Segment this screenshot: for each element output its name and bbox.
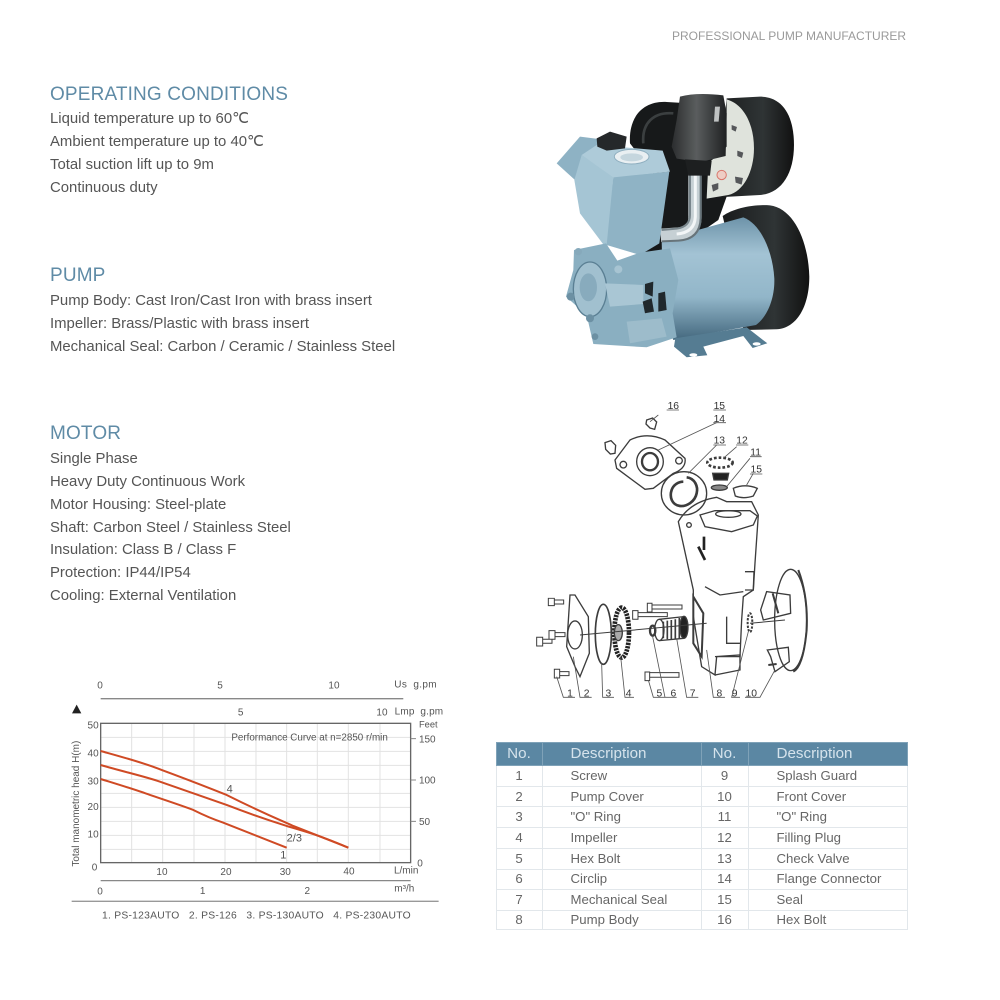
right axis labels: 150 (419, 734, 436, 745)
text: motor: Protection: IP44/IP54 (50, 565, 191, 581)
parts table: Check Valve (776, 851, 850, 866)
y axis labels: 30 (88, 776, 99, 787)
parts table: 15 (717, 892, 732, 907)
top axes: Lmp g.pm (395, 707, 443, 718)
parts table: Screw (570, 768, 607, 783)
y axis labels: 40 (88, 748, 99, 759)
flange connector (605, 418, 685, 489)
knob (672, 94, 727, 162)
pump cover (567, 595, 707, 677)
parts table: 2 (515, 789, 523, 804)
parts table: No. (713, 745, 736, 762)
bottom axes: m³/h (394, 884, 414, 895)
parts table: Filling Plug (776, 830, 841, 845)
parts table: 11 (718, 809, 731, 824)
chrome pipe (661, 173, 695, 235)
upper motor (717, 97, 794, 197)
parts table: "O" Ring (776, 809, 827, 824)
right axis labels: Feet (419, 719, 438, 729)
text: operating conditions: Ambient temperature up to 40℃ (50, 134, 264, 150)
curve labels (227, 783, 302, 862)
y axis labels: 20 (88, 802, 99, 813)
leader lines (557, 410, 775, 697)
y axis labels: 50 (88, 721, 99, 732)
heading: pump: PUMP (50, 265, 106, 286)
parts table: "O" Ring (570, 809, 621, 824)
parts table: 1 (515, 768, 523, 783)
part numbers: 7 (690, 688, 696, 699)
filling plug (597, 132, 627, 151)
pressure switch cover (707, 99, 754, 199)
text: operating conditions: Liquid temperature up to 60℃ (50, 111, 249, 127)
parts table: 4 (515, 830, 523, 845)
curve labels: 4 (227, 783, 233, 795)
part numbers: 13 (714, 436, 725, 447)
bottom axes: 0 (97, 887, 103, 898)
parts table: 9 (721, 768, 728, 783)
parts table: Impeller (570, 830, 617, 845)
mounting foot (674, 327, 767, 357)
part numbers: 14 (714, 414, 725, 425)
heading: motor: MOTOR (50, 423, 121, 444)
part numbers: 16 (668, 401, 679, 412)
part numbers: 2 (584, 688, 590, 699)
bottom axes: 20 (220, 867, 232, 878)
text: motor: Heavy Duty Continuous Work (50, 474, 245, 490)
knob nut (685, 159, 712, 176)
y axis labels: Total manometric head H(m) (71, 741, 82, 867)
parts table: 5 (515, 851, 523, 866)
part numbers: 5 (656, 688, 662, 699)
o ring (595, 604, 611, 664)
bottom axes: 2 (305, 886, 311, 897)
bottom axes (97, 866, 418, 898)
text: pump: Pump Body: Cast Iron/Cast Iron with brass insert (50, 293, 372, 309)
chart title: Performance Curve at n=2850 r/min (231, 733, 388, 744)
part numbers: 9 (732, 688, 738, 699)
part numbers: 15 (714, 401, 725, 412)
text: motor: Single Phase (50, 451, 138, 467)
bottom axes: 30 (280, 867, 291, 878)
text: pump (50, 293, 395, 355)
parts table: Circlip (570, 871, 607, 886)
splash guard (748, 613, 752, 632)
parts table: Description (570, 745, 646, 762)
bottom axes: 40 (343, 866, 355, 877)
text: pump: Mechanical Seal: Carbon / Ceramic / Stainless Steel (50, 339, 395, 355)
part numbers: 15 (751, 465, 762, 476)
front cover (750, 569, 807, 672)
parts table: Splash Guard (776, 768, 857, 783)
lower motor body (662, 217, 774, 340)
part numbers: 4 (626, 688, 632, 699)
parts table: 14 (717, 871, 732, 886)
parts table: 3 (515, 809, 523, 824)
top axes: 5 (217, 681, 223, 692)
curve 2/3 (101, 765, 348, 848)
right axis labels: 50 (419, 817, 431, 828)
curve 1 (101, 779, 287, 848)
part numbers: 6 (670, 688, 676, 699)
bottom axes: L/min (394, 866, 418, 877)
parts table: Pump Body (570, 912, 639, 927)
part numbers: 11 (750, 447, 761, 458)
parts table: No. (507, 745, 531, 762)
bottom axes: 10 (156, 867, 168, 878)
part numbers: 12 (736, 436, 748, 447)
pump volute (566, 243, 678, 347)
parts table: 7 (515, 892, 523, 907)
top axes: 5 (238, 708, 244, 719)
part numbers: 3 (605, 688, 611, 699)
parts table (496, 742, 908, 930)
parts table: Flange Connector (776, 871, 881, 886)
text: motor: Insulation: Class B / Class F (50, 542, 236, 558)
top axes (97, 679, 443, 719)
curve labels: 2/3 (287, 832, 302, 844)
top axes: 10 (328, 681, 340, 692)
screws (537, 598, 682, 681)
parts table: 13 (717, 851, 732, 866)
y axis labels: 0 (92, 862, 98, 873)
mechanical seal (655, 616, 688, 641)
lower motor end cap (723, 205, 809, 330)
right axis labels: 100 (419, 776, 436, 787)
impeller (614, 608, 629, 658)
top axes: 10 (376, 707, 388, 718)
parts table: Hex Bolt (776, 912, 826, 927)
parts table: 8 (515, 912, 523, 927)
text: motor (50, 451, 291, 604)
parts table: 10 (717, 789, 732, 804)
dark backing and hose loop (630, 102, 727, 255)
right axis labels (411, 719, 438, 869)
text: motor: Motor Housing: Steel-plate (50, 497, 226, 513)
top axes: 0 (97, 681, 103, 692)
text: pump: Impeller: Brass/Plastic with brass insert (50, 316, 309, 332)
parts table: Front Cover (776, 789, 846, 804)
filling plug and seals (707, 458, 757, 498)
part numbers (567, 401, 762, 699)
text: motor: Cooling: External Ventilation (50, 588, 236, 604)
text: motor: Shaft: Carbon Steel / Stainless Steel (50, 520, 291, 536)
text: operating conditions (50, 111, 264, 196)
text: operating conditions: Continuous duty (50, 180, 158, 196)
text: operating conditions: Total suction lift up to 9m (50, 157, 214, 173)
parts table: Seal (776, 892, 803, 907)
parts table: Pump Cover (570, 789, 644, 804)
pump body (678, 497, 758, 675)
parts table: 12 (717, 830, 732, 845)
curve 4 (101, 751, 348, 848)
parts table: Hex Bolt (570, 851, 620, 866)
parts table: Mechanical Seal (570, 892, 667, 907)
parts table: 6 (515, 871, 523, 886)
part numbers: 8 (716, 688, 722, 699)
circlip (650, 626, 655, 636)
y axis labels: 10 (88, 830, 99, 841)
chart legend: 1. PS-123AUTO 2. PS-126 3. PS-130AUTO 4. PS-230AUTO (102, 910, 411, 921)
check valve (661, 472, 707, 515)
heading: operating conditions: OPERATING CONDITIONS (50, 84, 288, 105)
curve labels: 1 (280, 850, 286, 862)
pump head block (557, 137, 602, 180)
right axis labels: 0 (417, 858, 423, 869)
y axis labels (71, 705, 99, 873)
bottom axes: 1 (200, 886, 206, 897)
plot grid (101, 723, 411, 863)
parts table: Description (776, 745, 852, 762)
parts table: 16 (717, 912, 732, 927)
part numbers: 10 (746, 688, 757, 699)
top axes: Us g.pm (394, 679, 437, 690)
part numbers: 1 (567, 688, 573, 699)
brand tagline: PROFESSIONAL PUMP MANUFACTURER (672, 29, 906, 43)
